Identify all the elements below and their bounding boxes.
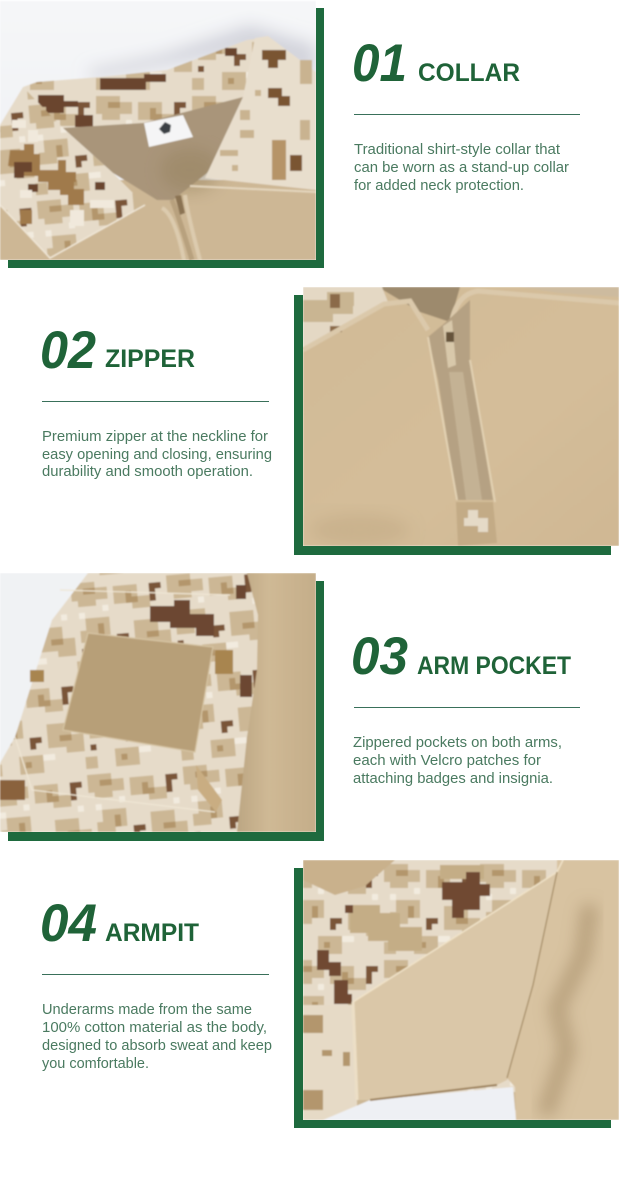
description: arm pocket	[353, 735, 562, 787]
description: arm pocket: attaching badges and insignia.	[353, 771, 553, 787]
description: armpit: designed to absorb sweat and keep	[42, 1038, 272, 1054]
description: armpit: 100% cotton material as the body,	[42, 1020, 267, 1036]
description: collar: Traditional shirt-style collar that	[354, 142, 560, 158]
photo: arm pocket	[0, 573, 316, 832]
description: armpit: Underarms made from the same	[42, 1002, 252, 1018]
panel: armpit photo with green frame	[294, 860, 619, 1128]
number 01: 01	[352, 34, 407, 93]
section 02: zipper text	[40, 321, 272, 480]
heading: collar: COLLAR	[418, 59, 520, 87]
green frame: armpit	[294, 868, 611, 1128]
photo: collar	[0, 1, 316, 260]
description: collar	[354, 142, 569, 194]
section 04: armpit text	[40, 894, 272, 1072]
panel: collar photo with green frame	[0, 1, 324, 268]
number 03: 03	[351, 627, 408, 686]
label tag	[144, 115, 193, 147]
photo: armpit	[303, 860, 619, 1120]
description: zipper: durability and smooth operation.	[42, 464, 253, 480]
section 03: arm pocket text	[351, 627, 580, 787]
photo: zipper	[303, 287, 619, 546]
heading: zipper: ZIPPER	[105, 345, 195, 373]
camo collar corner	[303, 287, 388, 348]
description: collar: for added neck protection.	[354, 178, 524, 194]
green frame: zipper	[294, 295, 611, 555]
panel: arm pocket photo with green frame	[0, 573, 324, 841]
panel: zipper photo with green frame	[294, 287, 619, 555]
description: collar: can be worn as a stand-up collar	[354, 160, 569, 176]
description: zipper: easy opening and closing, ensuring	[42, 447, 272, 463]
number 02: 02	[40, 321, 96, 380]
heading: arm pocket: ARM POCKET	[417, 652, 571, 680]
description: armpit: you comfortable.	[42, 1056, 149, 1072]
green frame: arm pocket	[8, 581, 324, 841]
description: zipper: Premium zipper at the neckline for	[42, 429, 268, 445]
description: arm pocket: each with Velcro patches for	[353, 753, 541, 769]
description: arm pocket: Zippered pockets on both arms,	[353, 735, 562, 751]
green frame: collar	[8, 8, 324, 268]
heading: armpit: ARMPIT	[105, 919, 199, 947]
description: zipper	[42, 429, 272, 480]
description: armpit	[42, 1002, 272, 1072]
number 04: 04	[40, 894, 97, 953]
section 01: collar text	[352, 34, 580, 194]
